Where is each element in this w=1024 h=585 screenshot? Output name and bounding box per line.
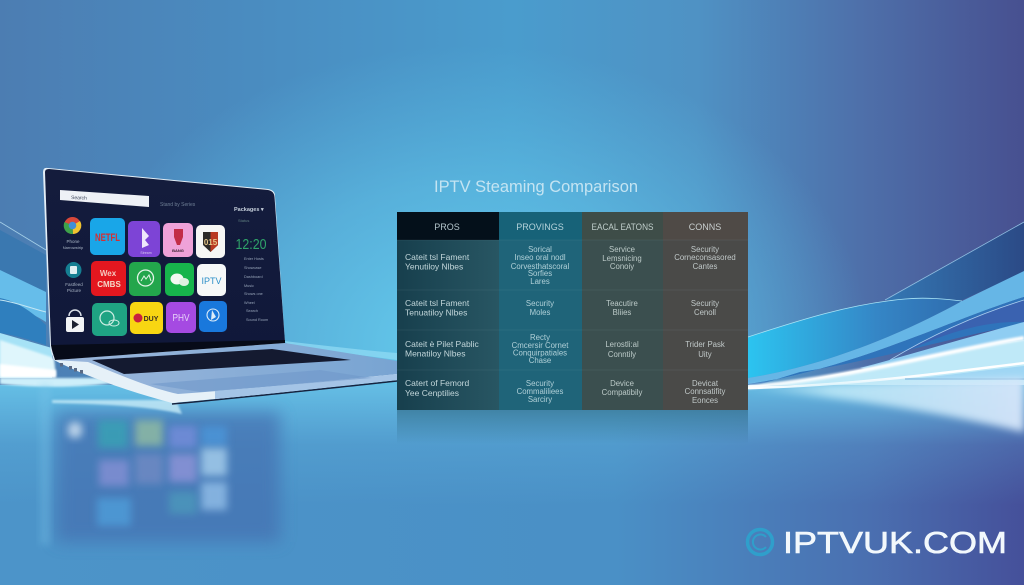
keyboard xyxy=(92,349,351,374)
column: evaluations: Service xyxy=(609,245,635,254)
app: Netflix xyxy=(90,218,125,255)
column: evaluations: Conntily xyxy=(608,350,636,359)
comparison table xyxy=(397,212,748,444)
column: conns: Trider Pask xyxy=(685,340,725,349)
app: shield: 015 xyxy=(204,238,218,247)
app: pink: BANG xyxy=(172,248,184,253)
trackpad shade xyxy=(150,370,372,392)
front edge right tint xyxy=(215,374,397,399)
app: yellow xyxy=(130,302,163,334)
column: conns: Uity xyxy=(698,350,712,359)
column: pros: Menatiloy Nlbes xyxy=(405,348,465,358)
clock: 12:20 xyxy=(236,236,266,253)
column: conns: Devicat xyxy=(692,379,719,388)
column: provings: Moles xyxy=(530,308,550,317)
column: provings: Inseo oral nodl xyxy=(514,253,566,262)
column: evaluations: Lerostli:al xyxy=(605,340,639,349)
thin horizon glow line xyxy=(284,341,397,360)
right flowing waves xyxy=(748,222,1024,432)
screen bottom strip xyxy=(51,340,285,360)
column: conns: CONNS xyxy=(689,222,721,232)
column: pros: Tenuatiloy Nlbes xyxy=(405,308,467,318)
sidebar menu xyxy=(238,218,268,322)
column: provings: Sorical xyxy=(528,245,552,254)
lid xyxy=(45,169,285,359)
app: green chat xyxy=(129,262,161,296)
base shadow xyxy=(172,381,397,404)
title: IPTV Steaming Comparison xyxy=(434,177,638,196)
sidebar menu: Sound Room xyxy=(246,318,268,322)
laptop xyxy=(43,168,397,404)
column: conns: Connsatifity xyxy=(685,387,725,396)
app: purple xyxy=(128,221,160,257)
search bar: Search xyxy=(71,195,87,202)
column: pros: Yee Cenptilies xyxy=(405,388,459,398)
column: evaluations: EACAL EATONS xyxy=(592,222,654,232)
app: red xyxy=(91,261,126,296)
column: provings: Conquirpatiales xyxy=(513,348,567,358)
app: purple PIN: PHV xyxy=(172,313,190,324)
column: evaluations xyxy=(582,212,663,410)
icon: browser xyxy=(63,217,84,250)
column: pros xyxy=(397,212,499,410)
sidebar menu: Music xyxy=(244,284,254,288)
left flowing waves xyxy=(0,222,120,387)
sidebar menu: Shows one xyxy=(244,292,263,296)
column: provings: Cmcersir Cornet xyxy=(512,341,569,350)
column: provings: Corvesthatscoral xyxy=(511,262,570,271)
column: evaluations: Compatibily xyxy=(602,388,642,397)
app: red: Wex xyxy=(100,269,117,278)
sidebar menu: Search xyxy=(246,309,258,313)
app: shield xyxy=(196,225,225,258)
column: evaluations: Conoiy xyxy=(610,262,634,271)
column: pros: Cateit è Pilet Pablic xyxy=(405,339,479,349)
icon: play xyxy=(66,310,84,332)
column: conns: Corneconsasored xyxy=(674,253,736,262)
lid bezel xyxy=(43,168,285,360)
icon: browser: Phone xyxy=(66,239,80,244)
column: conns: Security xyxy=(691,245,719,254)
column: pros: PROS xyxy=(434,222,460,232)
column: evaluations: Lemsnicing xyxy=(602,254,642,263)
app: green cloud xyxy=(165,263,194,296)
ports xyxy=(60,363,83,374)
sidebar menu: Dashboard xyxy=(244,275,263,279)
column: provings: Recty xyxy=(530,333,550,342)
column: pros: Catert of Femord xyxy=(405,378,470,388)
icon: files: Fastfeed xyxy=(65,282,83,287)
app: pink xyxy=(163,223,193,257)
column: pros: Cateit tsl Fament xyxy=(405,298,470,308)
app: red: CMBS xyxy=(97,280,121,289)
logo icon xyxy=(748,530,772,554)
app: teal xyxy=(92,303,127,336)
column: provings: Sarciry xyxy=(528,395,552,404)
laptop screen reflection xyxy=(40,385,280,545)
icon: files: Picture xyxy=(67,288,81,293)
app: IPTV xyxy=(197,264,226,296)
logo xyxy=(748,525,1007,560)
column: conns: Eonces xyxy=(692,396,718,405)
column: evaluations: Teacutire xyxy=(606,299,638,308)
sidebar menu: Status xyxy=(238,218,249,223)
column: conns: Cenoll xyxy=(694,308,716,317)
app: IPTV: IPTV xyxy=(202,276,222,286)
column: provings: Security xyxy=(526,299,554,308)
column: conns: Cantes xyxy=(693,262,717,271)
icon: browser: Narrowstrip xyxy=(63,245,84,250)
column: conns: Security xyxy=(691,299,719,308)
column: provings: Security xyxy=(526,379,554,388)
app: blue xyxy=(199,301,227,332)
logo text: IPTVUK.COM xyxy=(783,525,1007,560)
column: provings: Chase xyxy=(529,356,551,365)
column: provings: Commaliliees xyxy=(517,387,563,396)
search bar xyxy=(60,190,149,207)
profile label: Packages ▾ xyxy=(234,207,265,213)
laptop base xyxy=(52,343,397,402)
column: pros: Yenutiloy Nlbes xyxy=(405,262,463,272)
app: Netflix: NETFL xyxy=(95,232,120,244)
sidebar menu: Wheel xyxy=(244,301,255,305)
table reflection xyxy=(397,410,748,444)
row separators xyxy=(397,240,748,370)
app: purple PIN xyxy=(166,302,196,333)
column: provings: PROVINGS xyxy=(516,222,564,232)
header labels: Stand by Series xyxy=(160,202,196,208)
sidebar menu: Showcase xyxy=(244,266,262,270)
column: evaluations: Bliies xyxy=(613,308,631,317)
column: conns xyxy=(663,212,748,410)
column: evaluations: Device xyxy=(610,379,634,388)
column: provings: Lares xyxy=(530,277,550,286)
column: provings xyxy=(499,212,582,410)
floor xyxy=(0,385,1024,585)
app: yellow: DUY xyxy=(144,316,159,323)
column: pros: Cateit tsl Fament xyxy=(405,252,470,262)
base front edge xyxy=(54,360,397,403)
column: provings: Sorfies xyxy=(528,269,552,278)
app: purple: Stream xyxy=(140,251,152,255)
sidebar menu: Enter Hosts xyxy=(244,257,264,261)
icon: files xyxy=(65,262,83,293)
